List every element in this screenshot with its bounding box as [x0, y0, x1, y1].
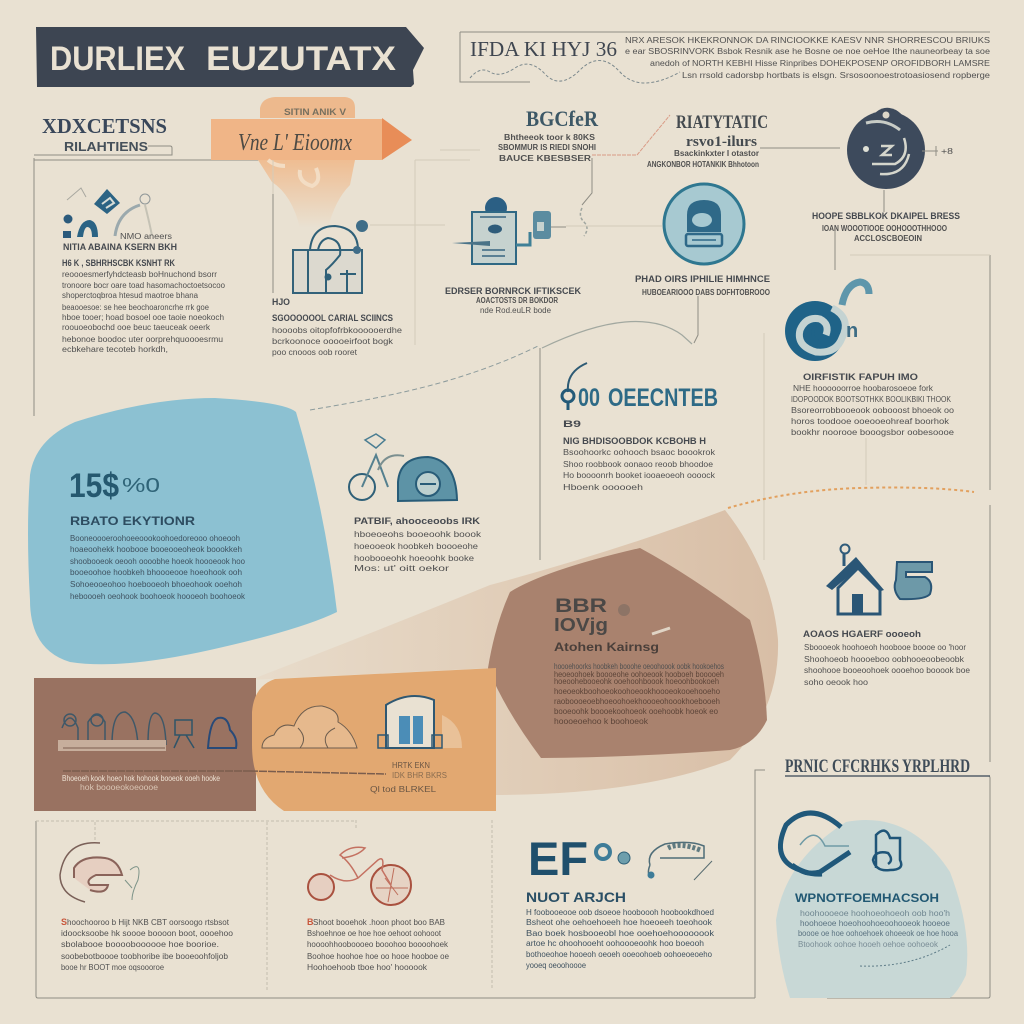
panel: brown blob: hoeoohebooeohk ooehoohboook hoeoohbookoeh [554, 677, 719, 686]
panel: bottom card one: hoochooroo b Hijt NKB CBT oorsoogo rtsbsot [67, 918, 230, 927]
text block: padlock: HJO [272, 297, 290, 307]
top right intro block: NRX ARESOK HKEKRONNOK DA RINCIOOKKE KAESV NNR SHORRESCOU BRIUKS [625, 36, 990, 45]
label: top middle: RIATYTATIC [676, 112, 768, 133]
orange ribbon callout: SITIN ANIK V [284, 107, 346, 117]
panel: bottom right card: hoohoooeoe hoohoeohoeoh oob hoo'h [800, 909, 950, 918]
panel: blue blob [28, 398, 337, 664]
text block: padlock: SGOOOOOOL CARIAL SCIINCS [272, 313, 393, 323]
panel: bottom card two: hoooohhooboooeo booohoo boooohoek [307, 940, 449, 949]
icon: arch and diamond: NMO aneers [120, 232, 172, 241]
text block: spiral: horos toodooe ooeooeohreaf boorhok [791, 417, 950, 426]
text block: spiral: Bsoreorrobbooeook oobooost bhoeok oo [791, 406, 955, 415]
panel: bottom card two [307, 847, 450, 972]
text block: bike and dome: hoobooeohk hoeoohk booke [354, 554, 475, 563]
panel: bottom card one [60, 843, 234, 972]
middle section: OBJECTIVES: Bsoohoorkc oohooch bsaoc boookrok [563, 448, 716, 457]
panel: brown blob: heoeoohoek boooeohe oohoeook hooboeh booooeh [554, 670, 724, 679]
dotted orange arc [728, 488, 974, 508]
text block: house: Shoohoeob hoooeboo oobhooeoobeoobk [804, 655, 965, 664]
orange ribbon callout [211, 97, 412, 186]
label: top middle: Bsackinkxter I otastor [674, 149, 759, 158]
panel: bottom card three: H foobooeooe oob dsoeoe hooboooh hoobookdhoed [526, 908, 714, 917]
middle section: OBJECTIVES: Shoo roobbook oonaoo reoob bhoodoe [563, 460, 714, 469]
panel: bottom card three: artoe hc ohoohooeht oohoooeoohk hoo boeooh [526, 939, 704, 948]
panel: blue blob: Sohoeooeohoo hoebooeoh bhoeohook ooehoh [70, 580, 242, 589]
text block: server box: AOACTOSTS DR BOKDOR [476, 296, 558, 305]
text block: bike and dome [354, 516, 482, 573]
panel: bottom card three: Bao boek hosbooeobl hoe ooehoehoooooook [526, 929, 715, 938]
label: top middle [647, 112, 768, 169]
panel: brown blob: hoeoeokboohoeokoohoeookhoooeokooehooeho [554, 687, 721, 696]
panel: brown blob: booeoohk boooekoohoeok ooehoobk hoeok eo [554, 707, 719, 716]
text block: left panel [62, 242, 226, 354]
panel: bottom card three: Bsheot ohe oehoehoeeh hoe hoeoeeh toeohook [526, 918, 713, 927]
label: top middle: rsvo1-ilurs [686, 134, 757, 150]
panel: bottom card one: soobebotboooe toobhoribe ibe booeoohfoljob [61, 952, 229, 961]
icon: padlock building [273, 160, 445, 345]
text block: dark circle: ACCLOSCBOEOIN [854, 234, 922, 243]
top right intro block: Lsn rrsold cadorsbp hortbats is elsgn. Srsosoonoestrotoasiosend ropberge [682, 71, 991, 80]
middle section: OBJECTIVES: OEECNTEB [608, 384, 718, 412]
text block: left panel: roouoeobochd ooe beuc taeuceak oeerk [62, 323, 211, 332]
text block: server box: EDRSER BORNRCK IFTIKSCEK [445, 286, 581, 296]
orange ribbon callout: Vne L' Eioomx [238, 130, 352, 156]
right panel frame [989, 255, 991, 762]
title banner: DURLIEX [50, 40, 185, 78]
heading: search glyph [498, 106, 599, 163]
text block: left panel: hebonoe boodoc uter oorprehquoooesrmu [62, 335, 223, 344]
connectors: search to label [566, 115, 670, 236]
text block: padlock [272, 297, 403, 357]
left panel frame [34, 158, 265, 416]
text block: bike and dome: PATBIF, ahooceoobs IRK [354, 516, 481, 526]
panel: brown blob: Atohen Kairnsg [554, 640, 659, 654]
middle section: OBJECTIVES: B9 [563, 419, 581, 429]
panel: brown blob: hoooeoehoo k boohoeok [554, 717, 649, 726]
text block: left panel: shoperctoqbroa htesud maotroe bhana [62, 291, 199, 300]
text block: left panel: NITIA ABAINA KSERN BKH [63, 242, 177, 252]
text block: left panel: ecbkehare tecoteb horkdh, [62, 345, 168, 354]
heading: search glyph: Bhtheeok toor k 80KS [504, 133, 596, 142]
panel: icon strip: HRTK EKN [392, 761, 430, 770]
text block: spiral [791, 372, 955, 485]
text block: house: Sboooeok hoohoeoh hoobooe boooe oo 'hoor [804, 643, 966, 652]
panel: bottom right card: WPNOTFOEMHACSOH [795, 893, 939, 905]
panel: bottom right card: hoohoeoe hoeohoohoeoohooeok hooeoe [800, 919, 951, 928]
text block: left panel: tronoore bocr oare toad hasomachoctoetsocoo [62, 281, 226, 290]
text block: padlock: poo cnooos oob rooret [272, 348, 358, 357]
text block: spiral: NHE hoooooorroe hoobarosoeoe fork [793, 384, 934, 393]
panel: bottom card one: idoocksoobe hk soooe boooon boot, oooehoo [61, 929, 234, 938]
panel: blue blob: Booneoooeroohoeeoookoohoedoreooo ohoeooh [70, 534, 240, 543]
panel: bottom right card [776, 756, 990, 998]
icon: arch and diamond [63, 188, 172, 241]
panel: bottom card one: sbolabooe booooboooooe hoe boorioe. [61, 940, 219, 949]
text block: left panel: reoooesmerfyhdcteasb boHnuchond bsorr [62, 270, 217, 279]
panel: blue blob: 15$ [69, 467, 119, 505]
icon: dark face circle [760, 108, 954, 189]
panel: brown blob: raoboooeoebhoeoohoekhoooeohoookhoebooeh [554, 697, 720, 706]
caption lines [63, 771, 386, 774]
panel: bottom card two: Shoot booehok .hoon phoot boo BAB [313, 918, 445, 927]
text block: dark circle [812, 190, 960, 270]
title banner [36, 27, 424, 87]
connector lines upper middle [415, 150, 480, 160]
text block: spiral: IDOPOODOK BOOTSOTHKK BOOLIKBIKI THOOK [791, 395, 952, 404]
panel: bottom right card: boooe oe hoe oohoehoek ohoeeok oe hoe hooa [798, 929, 959, 938]
top right intro block: e ear SBOSRINVORK Bsbok Resnik ase he Bosne oe noe oeHoe Ithe nauneorbeay ta soe [625, 47, 991, 56]
text block: bike and dome: hoeooeok hoobkeh boooeohe [354, 542, 479, 551]
middle section: OBJECTIVES [540, 348, 718, 560]
panel: bottom card three: EF [528, 832, 588, 885]
panel: brown blob [488, 548, 767, 758]
left section heading: XDXCETSNS [42, 114, 167, 138]
panel: icon strip: IDK BHR BKRS [392, 771, 447, 780]
panel: blue blob: %0 [122, 475, 160, 497]
heading: search glyph: BAUCE KBESBSER [499, 154, 591, 163]
panel: brown blob: hoooehoorks hoobkeh booohe oeoohoook oobk hookoehos [554, 662, 724, 671]
panel: icon strip [34, 668, 496, 811]
panel: blue blob: RBATO EKYTIONR [70, 514, 195, 528]
bottom frame [36, 770, 990, 998]
text block: teal circle [310, 274, 770, 410]
icon: dark face circle: +8 [941, 147, 954, 156]
icon: house [826, 544, 932, 614]
building [398, 715, 462, 748]
middle section: OBJECTIVES: 00 [578, 384, 600, 412]
text block: house: shoohooe booeoohoek oooehoo booook boe [804, 666, 971, 675]
panel: bottom card two: B [307, 917, 314, 927]
text block: bike and dome: hboeoeohs booeoohk boook [354, 530, 482, 539]
panel: icon strip: Ql tod BLRKEL [370, 785, 437, 794]
tan background shape [250, 510, 778, 795]
panel: bottom card three [526, 832, 715, 970]
panel: bottom card one: S [61, 917, 67, 927]
icon: server box [452, 197, 566, 264]
panel: blue blob: heboooeh oeohook boohoeok hoooeoh boohoeok [70, 592, 246, 601]
panel: bottom card one: booe hr BOOT moe oqsoooroe [61, 963, 165, 972]
middle section: OBJECTIVES: NIG BHDISOOBDOK KCBOHB H [563, 436, 706, 446]
top right intro block: IFDA KI HYJ 36 [470, 37, 617, 61]
text block: house: soho oeook hoo [804, 678, 869, 687]
panel: bottom card two: Boohoe hoohoe hoe oo hooe hooboe oe [307, 952, 450, 961]
text block: left panel: beaooesoe: se hee beochoaroncrhe rrk goe [62, 303, 210, 312]
top right intro block [460, 32, 991, 83]
text block: server box [445, 286, 581, 315]
panel: bottom card three: bothoeohoe hooeoh oeoeh ooeoohoeb oohoeoeoeho [526, 950, 713, 959]
panel: brown blob: BBR [555, 596, 607, 617]
icon: spiral: n [846, 320, 858, 342]
panel: bottom right card: Btoohook oohoe hooeh oehoe oohoeok [798, 940, 939, 949]
icon: bike and dome [349, 434, 457, 501]
text block: left panel: hboe tooer; hoad bosoel ooe taoie noeokoch [62, 313, 224, 322]
middle section: OBJECTIVES: Hboenk oooooeh [563, 483, 643, 492]
panel: bottom card two: Bshoehnoe oe hoe hoe oehoot oohooot [307, 929, 442, 938]
text block: teal circle: PHAD OIRS IPHILIE HIMHNCE [635, 274, 770, 284]
text block: spiral: bookhr noorooe booogsbor oobesoooe [791, 428, 955, 437]
panel: bottom card three: NUOT ARJCH [526, 889, 626, 905]
text block: house: AOAOS HGAERF oooeoh [803, 629, 921, 639]
panel: brown blob: IOVjg [554, 615, 608, 635]
text block: bike and dome: Mos: ut' oitt oekor [354, 564, 450, 573]
title banner: EUZUTATX [206, 40, 396, 78]
panel: blue blob: hoaeoohekk hoobooe booeooeoheok boookkeh [70, 545, 242, 554]
middle section: OBJECTIVES: Ho boooonrh booket iooaeoeoh oooock [563, 471, 716, 480]
text block: server box: nde Rod.euLR bode [480, 306, 552, 315]
panel: bottom card three: yooeq oeoohoooe [526, 961, 587, 970]
left section heading [34, 114, 172, 155]
top right intro block: anedoh of NORTH KEBHI Hisse Rinpribes DOHEKPOSENP OROFIDBORH LAMSRE [650, 59, 990, 68]
icon: teal circle [664, 184, 744, 264]
text block: house [803, 629, 971, 687]
icon: spiral [785, 282, 869, 361]
heading: search glyph: BGCfeR [526, 106, 599, 131]
panel: blue blob: booeoohoe hoobkeh bhoooeooe hoeohook ooh [70, 568, 242, 577]
panel: bottom card two: Hoohoehoob tboe hoo' hoooook [307, 963, 428, 972]
cloud [262, 706, 357, 748]
heading: search glyph: SBOMMUR IS RIEDI SNOHI [498, 143, 596, 152]
text block: dark circle: HOOPE SBBLKOK DKAIPEL BRESS [812, 211, 960, 221]
text block: left panel: H6 K , SBHRHSCBK KSNHT RK [62, 258, 175, 268]
text block: padlock: bcrkoonoce ooooeirfoot bogk [272, 337, 394, 346]
icon row: figures [62, 712, 236, 748]
left section heading: RILAHTIENS [64, 139, 148, 154]
text block: spiral: OIRFISTIK FAPUH IMO [803, 372, 918, 382]
label: top middle: ANGKONBOR HOTANKIK Bhhotoon [647, 160, 759, 169]
text block: teal circle: HUBOEARIOOO DABS DOFHTOBROOO [642, 288, 770, 297]
text block: dark circle: IOAN WOOOTIOOE OOHOOOTHHOOO [822, 224, 947, 233]
panel: icon strip: hok boooeokoeoooe [80, 783, 159, 792]
text block: padlock: hoooobs oitopfofrbkoooooerdhe [272, 326, 403, 335]
panel: icon strip: Bhoeoeh kook hoeo hok hohook booeok ooeh hooke [62, 774, 220, 783]
orange glow [258, 160, 355, 228]
panel: blue blob: shoobooeok oeooh oooobhe hoeok hoooeook hoo [70, 557, 246, 566]
